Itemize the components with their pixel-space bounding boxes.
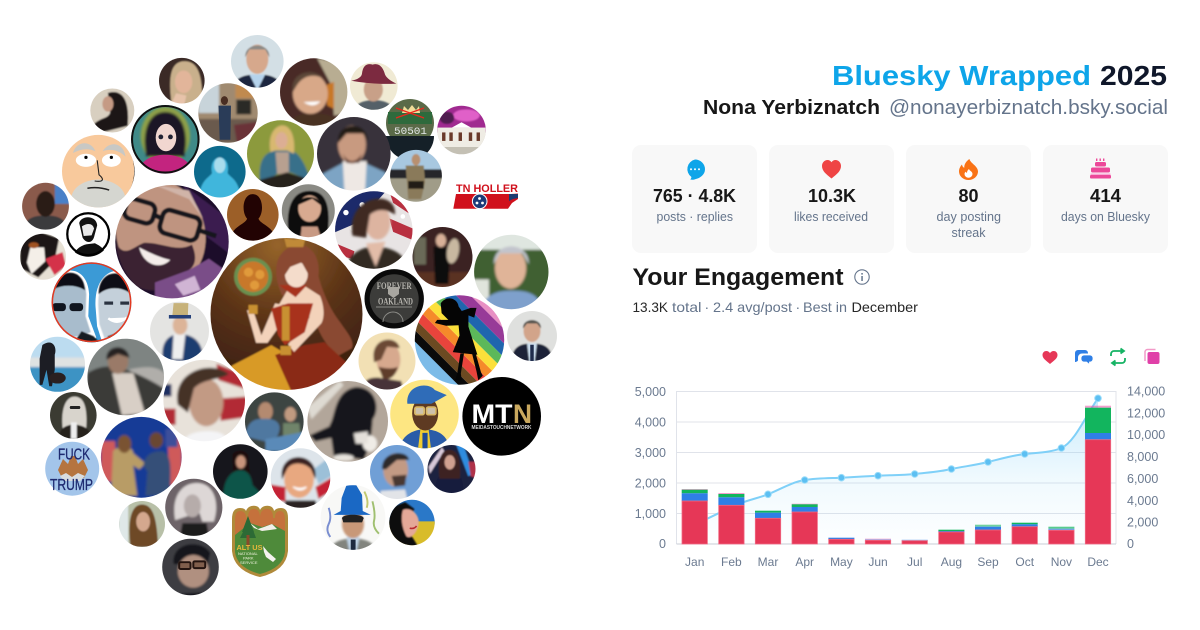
avatar: young man with flag xyxy=(164,360,245,441)
right axis labels: 8,000 xyxy=(1127,450,1158,464)
user name and handle: @nonayerbiznatch.bsky.social xyxy=(889,97,1168,119)
user name and handle: Nona Yerbiznatch xyxy=(703,97,880,119)
icon: replies xyxy=(1075,350,1093,364)
avatar: MeidasTouch Network logo xyxy=(462,377,541,456)
avatar: Uncle Sam poster xyxy=(150,302,209,361)
right axis labels: 10,000 xyxy=(1127,428,1165,442)
right axis labels: 2,000 xyxy=(1127,516,1158,530)
right axis labels xyxy=(1127,384,1165,551)
avatar: Alt US National Park Service badge: PARK xyxy=(243,556,254,560)
month labels: Aug xyxy=(941,555,962,569)
title xyxy=(832,60,1167,91)
grid lines and axes xyxy=(676,391,1116,544)
stat label: streak xyxy=(952,225,986,240)
left axis labels: 1,000 xyxy=(635,507,666,521)
month labels: Dec xyxy=(1087,555,1109,569)
avatar: FUCK TRUMP graphic xyxy=(45,442,99,496)
panel: days on Bluesky xyxy=(1043,145,1168,253)
avatar: woman with Ukrainian flag xyxy=(389,500,435,546)
icon: heart xyxy=(822,160,841,178)
avatar: Forever Oakland Raiders: FOREVER xyxy=(377,281,412,291)
avatar: police officer with cars xyxy=(385,145,447,209)
engagement summary: total xyxy=(672,299,702,315)
left axis labels: 3,000 xyxy=(635,446,666,460)
stat value: 765 · 4.8K xyxy=(653,186,736,206)
left axis labels: 2,000 xyxy=(635,476,666,490)
left axis labels: 0 xyxy=(659,537,666,551)
avatar: older man in suit xyxy=(231,35,284,88)
avatar: anime woman with bouquet xyxy=(210,238,362,390)
avatar: woman on TV set xyxy=(428,445,476,493)
month labels: Jun xyxy=(868,555,888,569)
month labels: Sep xyxy=(977,555,999,569)
icon: flame xyxy=(959,159,978,180)
like bars xyxy=(682,440,1111,544)
icon: info xyxy=(855,270,869,284)
avatar: woman in sunglasses, monochrome xyxy=(50,392,97,439)
month labels: Mar xyxy=(758,555,778,569)
month labels: Nov xyxy=(1051,555,1072,569)
stat value: 80 xyxy=(958,186,978,206)
avatar: Forever Oakland Raiders xyxy=(364,269,424,328)
avatar: Lincoln line art xyxy=(66,212,110,257)
header xyxy=(703,60,1168,119)
avatar: pride stripes with silhouette of woman xyxy=(414,295,504,385)
heading: Your Engagement: Your Engagement xyxy=(632,264,844,291)
avatar: FUCK TRUMP graphic: FUCK xyxy=(58,446,90,464)
avatar: FUCK TRUMP graphic: TRUMP xyxy=(50,477,93,494)
avatar: cartoon old man xyxy=(62,134,135,208)
panel: likes received xyxy=(769,145,894,253)
avatar: Alt US National Park Service badge: ALT US xyxy=(236,545,263,552)
stat value: 414 xyxy=(1090,186,1121,206)
avatar: MeidasTouch Network logo: N xyxy=(513,399,532,429)
avatar: woman in room xyxy=(198,83,258,143)
engagement summary xyxy=(632,299,918,315)
month labels: May xyxy=(830,555,853,569)
stat label: days on Bluesky xyxy=(1061,209,1150,224)
month labels xyxy=(685,555,1109,569)
right axis labels: 12,000 xyxy=(1127,406,1165,420)
right axis labels: 4,000 xyxy=(1127,494,1158,508)
icon: chat bubble xyxy=(687,160,705,180)
avatar: smiling brunette xyxy=(119,501,165,547)
avatar: two men on blue, red ring xyxy=(52,262,132,342)
avatar: platinum-haired woman, monochrome xyxy=(165,478,222,536)
avatar: cartoon man with cap and glasses xyxy=(390,380,459,448)
avatar: man in New Year hat xyxy=(321,485,385,550)
avatar: smiling news anchor with flag xyxy=(270,448,330,508)
icon: reposts xyxy=(1111,348,1125,366)
repost bars xyxy=(682,408,1111,531)
right axis labels: 14,000 xyxy=(1127,384,1165,398)
stat value: 10.3K xyxy=(808,186,856,206)
month labels: Feb xyxy=(721,555,742,569)
avatar bubble cluster xyxy=(15,30,562,601)
month labels: Apr xyxy=(795,555,814,569)
avatar: Forever Oakland Raiders: OAKLAND xyxy=(378,296,413,306)
line markers xyxy=(765,395,1101,498)
avatar: blonde woman xyxy=(159,58,205,104)
engagement summary: 13.3K xyxy=(632,299,669,315)
title: Bluesky Wrapped xyxy=(832,60,1091,91)
avatar: 50501 tank graphic: 50501 xyxy=(394,127,427,138)
left axis labels: 4,000 xyxy=(635,416,666,430)
month labels: Jul xyxy=(907,555,922,569)
icon: likes xyxy=(1042,351,1058,364)
avatar: MeidasTouch Network logo: MEIDASTOUCHNETWORK xyxy=(472,425,532,431)
month labels: Jan xyxy=(685,555,704,569)
avatar: TN Holler logo: TN HOLLER xyxy=(456,183,518,195)
cumulative line xyxy=(695,398,1098,524)
avatar: 50501 tank graphic xyxy=(386,99,434,160)
avatar: men in cockpit xyxy=(245,392,304,451)
chart: monthly engagement stacked bars with cumulative line xyxy=(635,384,1165,569)
title: 2025 xyxy=(1100,60,1167,91)
avatar: woman with American flag xyxy=(327,184,420,276)
avatar: blonde woman on grass xyxy=(240,114,321,194)
avatar: dark man with glasses xyxy=(162,538,219,596)
cumulative area xyxy=(695,398,1098,544)
right axis labels: 6,000 xyxy=(1127,472,1158,486)
avatar: black Portuguese water dog xyxy=(307,381,388,462)
avatar: TN Holler logo xyxy=(453,183,518,209)
stat label xyxy=(936,209,1001,240)
avatar: Alt US National Park Service badge xyxy=(232,506,288,577)
right axis labels: 0 xyxy=(1127,537,1134,551)
reply bars xyxy=(682,433,1111,541)
left axis labels xyxy=(635,385,666,551)
month labels: Oct xyxy=(1015,555,1035,569)
chart legend icons xyxy=(1042,348,1160,366)
avatar: woman holding dog xyxy=(406,221,478,293)
stat label: day posting xyxy=(936,209,1001,224)
avatar: blue hoodie xyxy=(194,146,246,198)
avatar: handshake with flags xyxy=(100,416,182,498)
quote bars xyxy=(682,406,1111,539)
avatar: man in blue blazer xyxy=(317,117,391,190)
engagement summary: · xyxy=(704,299,709,315)
avatar: White House with fireworks xyxy=(437,106,486,154)
avatar: MeidasTouch Network logo: MT xyxy=(472,399,513,429)
avatar: Alt US National Park Service badge: SERVICE xyxy=(240,560,258,565)
stat label: posts · replies xyxy=(656,209,733,224)
icon: birthday cake xyxy=(1090,158,1111,178)
avatar: man in suit, light background xyxy=(507,311,557,361)
engagement summary: 2.4 avg/post xyxy=(713,299,792,315)
avatar: bearded man with glasses xyxy=(358,332,416,390)
avatar: older smiling man in checked shirt xyxy=(467,227,556,317)
engagement summary: · xyxy=(796,299,800,315)
avatar: dark-haired woman in profile xyxy=(90,88,134,132)
avatar: man with beard on blue xyxy=(370,445,424,499)
avatar: Alt US National Park Service badge: NATIONAL xyxy=(238,551,258,556)
avatar: cavalier spaniel xyxy=(20,234,66,280)
left axis labels: 5,000 xyxy=(635,385,666,399)
user name and handle xyxy=(703,97,1168,119)
engagement summary: Best in xyxy=(803,299,847,315)
engagement summary: December xyxy=(852,299,918,315)
avatar: illustrated girl in pink xyxy=(131,105,200,174)
avatar: woman in green dress xyxy=(213,444,268,499)
avatar: man in hoodie xyxy=(22,182,69,230)
avatar: smiling man in boat xyxy=(280,58,348,126)
avatar: smiling man with glasses xyxy=(115,185,229,298)
avatar: default silhouette xyxy=(227,189,279,241)
avatar: smiling dark-haired woman xyxy=(276,179,340,242)
avatar: silhouette at beach xyxy=(30,336,85,392)
avatar: man with dark jacket xyxy=(87,338,164,416)
stat label: likes received xyxy=(794,209,868,224)
panel: day posting streak xyxy=(906,145,1031,253)
icon: quotes xyxy=(1145,350,1160,364)
panel: posts and replies xyxy=(632,145,757,253)
avatar: man in maroon hat xyxy=(350,62,398,110)
